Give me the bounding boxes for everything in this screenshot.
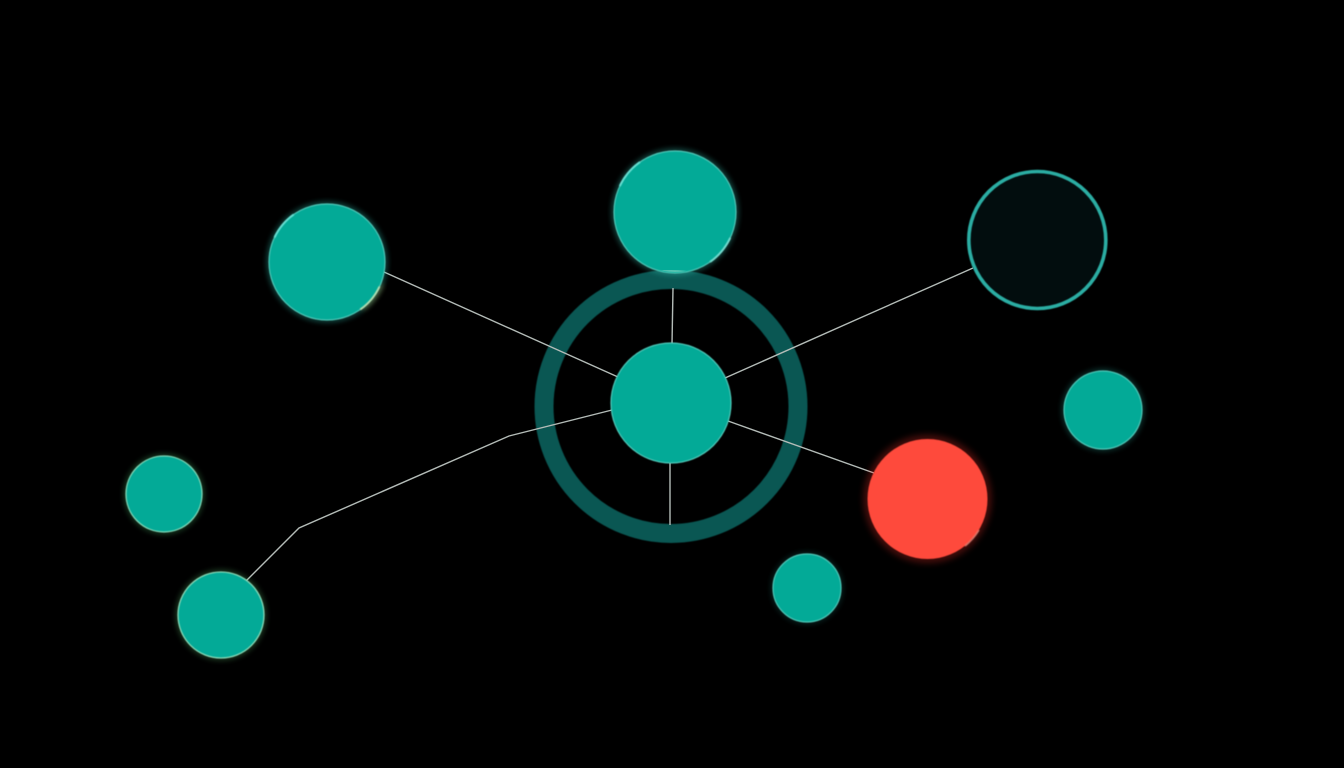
node: left small: [126, 456, 202, 532]
network diagram: [121, 146, 1146, 663]
node: bottom small: [773, 554, 841, 622]
node: right small: [1064, 371, 1142, 449]
node: upper left: [269, 204, 385, 320]
node: dark outlined upper right: [969, 172, 1106, 308]
outer ring around hub: [544, 280, 798, 534]
node: top center: [608, 146, 742, 278]
node: red alert: [868, 439, 988, 559]
node: central hub: [611, 343, 731, 463]
connector lines: [246, 268, 973, 581]
node: bottom left: [178, 572, 264, 658]
